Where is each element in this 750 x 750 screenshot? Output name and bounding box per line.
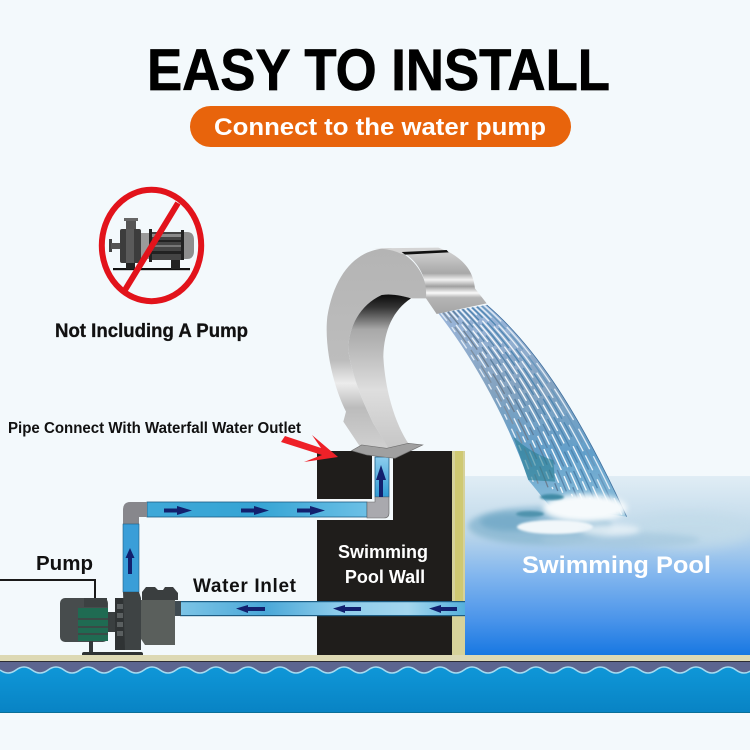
faucet spout [402,248,487,314]
label: swimming pool wall: Pool Wall [345,567,425,587]
motor green panel [78,598,108,641]
label: pump: Pump [36,553,93,575]
icon: no pump sign [102,190,201,301]
pill text: Connect to the water pump [214,114,546,141]
wave line [0,667,750,673]
water streaks [441,305,622,515]
wave water [0,667,750,713]
faucet inner arch [348,294,411,453]
mount flange [352,443,423,458]
label: water inlet: Water Inlet [193,576,297,597]
vertical wall pipe [375,457,389,497]
pool floor water [0,662,750,713]
pump [60,587,181,657]
label: swimming pool: Swimming Pool [522,552,711,579]
pump in sign [109,218,194,270]
motor body [60,598,108,642]
inlet pipe [180,601,465,616]
red circle [102,190,201,301]
pump foot [82,641,143,657]
ground ledge [0,655,750,662]
water splash [468,507,750,548]
strainer [141,600,175,645]
foam at waterfall base [516,494,640,536]
wall [317,451,465,655]
pump power line [0,580,95,598]
faucet body front [327,248,427,453]
red arrow [281,435,338,462]
outlet pipe [123,452,393,592]
horizontal pipe [147,502,367,517]
strainer lid [142,587,178,600]
title: EASY TO INSTALL [147,38,610,103]
faucet top plane [373,248,448,254]
outlet slot [402,250,449,255]
pump outlet collar [175,601,181,616]
volute [123,592,141,650]
label: pipe connect: Pipe Connect With Waterfall Water Outlet [8,420,301,437]
pill shape [190,106,571,147]
ribbed flange [115,598,125,650]
pool water [465,476,750,656]
cream wall stripe [452,451,465,655]
flow arrows [126,465,457,613]
pump housing [108,612,115,632]
left elbow [123,502,147,524]
red slash [125,203,178,290]
label: swimming pool wall: Swimming [338,542,428,562]
subtitle pill [190,106,571,147]
rising pipe [123,524,139,592]
wall elbow [367,497,389,518]
label: not including a pump: Not Including A Pump [55,320,248,342]
waterfall feature [327,248,627,517]
dark band [0,662,750,676]
wall black block [317,451,452,655]
water stream [438,305,627,517]
